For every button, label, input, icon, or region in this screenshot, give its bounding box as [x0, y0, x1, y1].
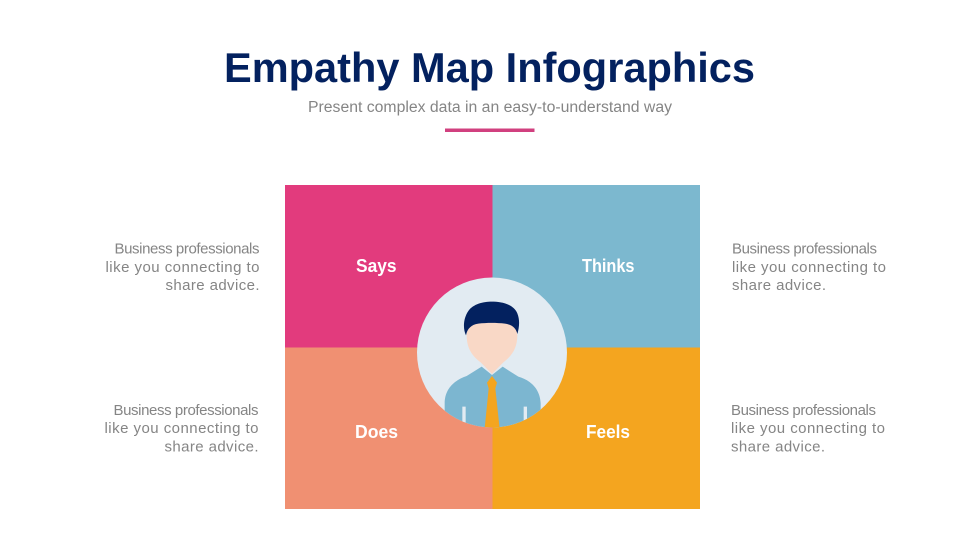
panel: says [285, 185, 492, 348]
face [467, 320, 517, 374]
text block: says [106, 240, 260, 294]
label: says: Says [356, 256, 396, 276]
tie [484, 376, 500, 428]
text block: feels: Business professionals [731, 402, 876, 419]
panel: thinks [492, 185, 700, 348]
text block: says: share advice. [166, 277, 260, 294]
text block: does: Business professionals [114, 402, 258, 419]
panel: does [285, 348, 492, 509]
panel: feels [492, 348, 700, 509]
label: feels: Feels [586, 422, 630, 442]
text block: says: Business professionals [114, 240, 260, 258]
text block: feels [731, 402, 885, 456]
text block: does: share advice. [164, 438, 258, 456]
icon: person in circle [417, 278, 567, 435]
text block: feels: share advice. [731, 438, 825, 456]
text block: says: like you connecting to [106, 259, 260, 276]
title: Empathy Map Infographics [224, 44, 755, 91]
shirt [444, 366, 541, 428]
title underline [445, 128, 534, 132]
text block: thinks: share advice. [732, 277, 826, 294]
subtitle: Present complex data in an easy-to-understand way [308, 99, 672, 116]
text block: feels: like you connecting to [731, 420, 885, 437]
label: does: Does [355, 422, 398, 442]
hair [464, 302, 519, 335]
text block: thinks: like you connecting to [732, 259, 886, 276]
label: thinks: Thinks [582, 256, 634, 276]
text block: does: like you connecting to [104, 420, 258, 437]
text block: does [104, 402, 258, 456]
text block: thinks: Business professionals [732, 240, 877, 258]
sleeve marks [462, 407, 527, 423]
panel: empathy map [285, 185, 700, 509]
text block: thinks [732, 240, 886, 294]
